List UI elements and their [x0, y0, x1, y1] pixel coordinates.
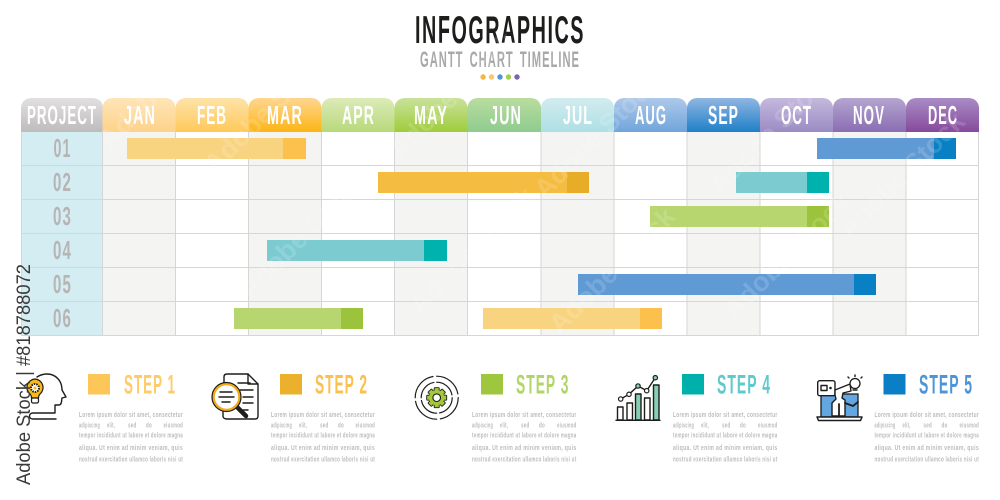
header row: MAY: [414, 100, 448, 130]
step 1 legend: STEP 1: [124, 370, 176, 400]
colour swatch: [481, 374, 503, 394]
description: eiusmod: [960, 422, 979, 430]
icon: gear with circular arrows: [415, 376, 458, 419]
description: eiusmod: [758, 422, 778, 430]
title: INFOGRAPHICS: [415, 9, 585, 52]
colour swatch: [884, 374, 906, 394]
icon: document with magnifier: [212, 374, 258, 419]
icon: laptop with presenter: [817, 375, 862, 420]
description: elit,: [107, 422, 115, 430]
subtitle: GANTT CHART TIMELINE: [420, 47, 580, 72]
description: do: [539, 422, 545, 430]
decorative colour dots: [480, 74, 520, 80]
header row: DEC: [928, 100, 958, 130]
bar: project 01 step 5: [817, 138, 956, 159]
description: tempor incididunt ut labore et dolore magna: [472, 432, 576, 440]
step 1 legend: [27, 370, 183, 464]
description: Lorem ipsum dolor sit amet, consectetur: [472, 412, 576, 419]
step 2 legend: [212, 370, 375, 464]
stock watermark pattern: Adobe Stock: [198, 41, 337, 179]
description: do: [146, 422, 152, 430]
description: [673, 412, 778, 464]
description: nostrud exercitation ullamco laboris nisi ut: [79, 456, 183, 464]
icon: growth bar chart: [616, 376, 660, 420]
description: nostrud exercitation ullamco laboris nisi ut: [271, 456, 375, 464]
step 4 legend: [616, 370, 778, 464]
colour swatch: [280, 374, 302, 394]
header row: JUL: [563, 100, 593, 130]
heading: STEP 3: [516, 370, 570, 400]
colour swatch: [88, 374, 110, 394]
description: aliqua. Ut enim ad minim veniam, quis: [271, 445, 375, 452]
step 3 legend: [415, 370, 577, 464]
stock watermark pattern: Adobe Stock: [718, 186, 857, 324]
description: sed: [128, 422, 136, 430]
description: aliqua. Ut enim ad minim veniam, quis: [79, 445, 183, 452]
project numbers: 04: [53, 235, 72, 265]
description: aliqua. Ut enim ad minim veniam, quis: [472, 445, 576, 452]
description: Lorem ipsum dolor sit amet, consectetur: [271, 412, 375, 419]
description: [271, 412, 375, 464]
gantt chart grid: [21, 132, 979, 336]
header row: FEB: [197, 100, 227, 130]
header row: [21, 98, 979, 132]
description: [79, 412, 183, 464]
project numbers: 03: [53, 201, 72, 231]
description: elit,: [500, 422, 508, 430]
icon: head with lightbulb: [27, 374, 66, 419]
bar: project 06 step 3: [234, 308, 363, 329]
bar: project 05 step 5: [578, 274, 876, 295]
gantt bars: [127, 138, 956, 329]
description: adipiscing: [874, 422, 896, 430]
description: eiusmod: [356, 422, 375, 430]
description: nostrud exercitation ullamco laboris nisi ut: [673, 456, 778, 464]
description: Lorem ipsum dolor sit amet, consectetur: [79, 412, 183, 419]
header row: OCT: [781, 100, 812, 130]
description: [472, 412, 577, 464]
bar: project 03 step 3: [650, 206, 829, 227]
description: sed: [924, 422, 932, 430]
header row: AUG: [635, 100, 667, 130]
project numbers: 05: [53, 269, 72, 299]
description: adipiscing: [79, 422, 100, 430]
stock watermark pattern: Adobe Stock: [93, 16, 232, 154]
stock watermark pattern: Adobe Stock: [383, 26, 522, 164]
stock watermark pattern: Adobe Stock: [528, 66, 667, 204]
header row: SEP: [708, 100, 739, 130]
header row: APR: [342, 100, 375, 130]
description: tempor incididunt ut labore et dolore magna: [271, 432, 375, 440]
project numbers: 02: [53, 167, 72, 197]
description: elit,: [299, 422, 307, 430]
header row: JUN: [490, 100, 522, 130]
description: Lorem ipsum dolor sit amet, consectetur: [673, 412, 778, 419]
step 5 legend: [817, 370, 979, 464]
stock watermark pattern: Adobe Stock: [833, 106, 972, 244]
description: tempor incididunt ut labore et dolore magna: [673, 432, 778, 440]
header row: MAR: [267, 100, 303, 130]
stock watermark pattern: Adobe Stock: [403, 181, 542, 319]
header row: NOV: [853, 100, 885, 130]
stock watermark pattern: Adobe Stock: [233, 166, 372, 304]
description: elit,: [902, 422, 910, 430]
description: adipiscing: [472, 422, 493, 430]
heading: STEP 4: [717, 370, 771, 400]
header row: PROJECT: [27, 100, 97, 130]
description: sed: [320, 422, 328, 430]
stock watermark pattern: Adobe Stock: [703, 61, 842, 199]
description: tempor incididunt ut labore et dolore magna: [79, 432, 183, 440]
description: sed: [521, 422, 530, 430]
bar: project 01 step 1: [127, 138, 306, 159]
description: do: [942, 422, 948, 430]
description: sed: [722, 422, 730, 430]
description: eiusmod: [164, 422, 183, 430]
colour swatch: [682, 374, 704, 394]
description: do: [338, 422, 344, 430]
heading: STEP 2: [315, 370, 368, 400]
header row: JAN: [124, 100, 156, 130]
description: eiusmod: [557, 422, 576, 430]
stock watermark pattern: Adobe Stock: [543, 201, 682, 339]
description: aliqua. Ut enim ad minim veniam, quis: [673, 445, 778, 452]
stock id side label: Adobe Stock | #818788072: [14, 264, 35, 485]
description: adipiscing: [271, 422, 292, 430]
description: [874, 412, 979, 464]
description: elit,: [701, 422, 709, 430]
bar: project 06 step 1: [483, 308, 662, 329]
project numbers: 01: [54, 133, 72, 163]
bar: project 02 step 4: [736, 172, 829, 193]
description: nostrud exercitation ullamco laboris nisi ut: [472, 456, 577, 464]
stock watermark pattern: [93, 16, 972, 339]
project numbers: [53, 133, 72, 333]
description: do: [740, 422, 746, 430]
bar: project 04 step 4: [267, 240, 447, 261]
bar: project 02 step 2: [378, 172, 589, 193]
project numbers: 06: [53, 303, 72, 333]
description: adipiscing: [673, 422, 694, 430]
